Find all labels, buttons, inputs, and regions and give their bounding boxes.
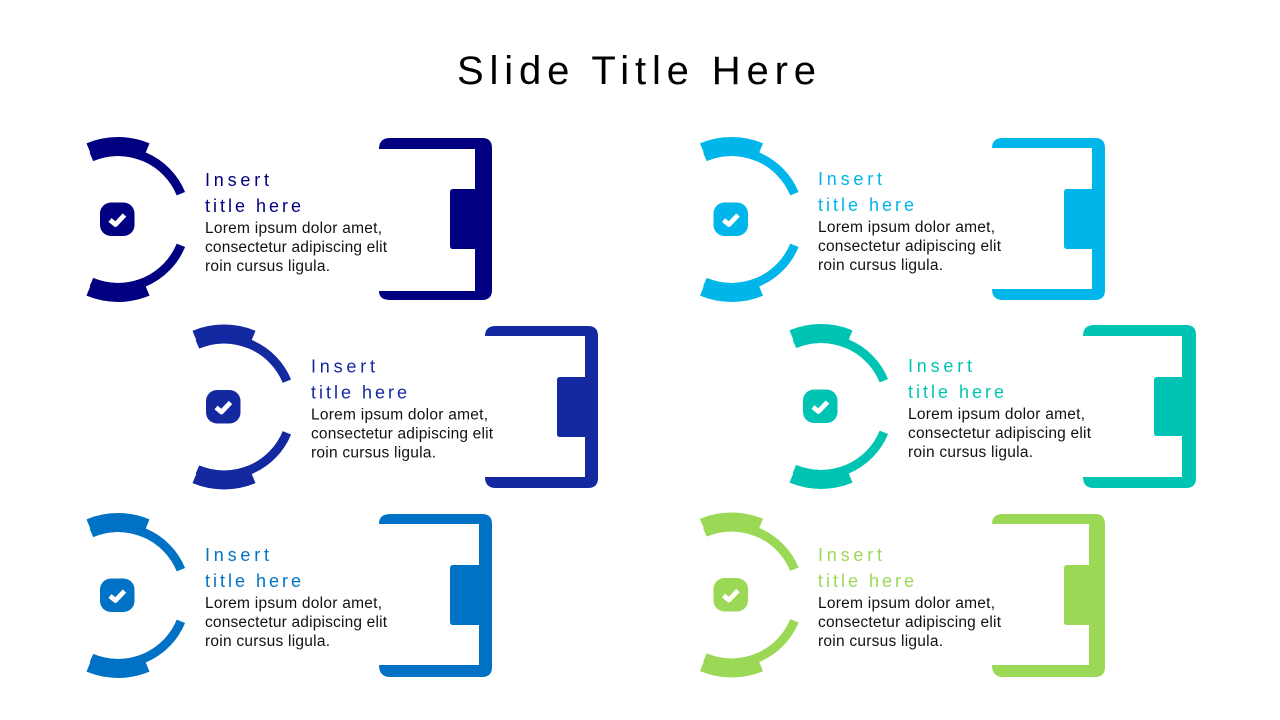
text: blue item: Insert — [205, 545, 269, 565]
text: teal item: consectetur adipiscing elit — [908, 425, 1092, 442]
text: sky blue item: title here — [818, 195, 914, 215]
text: teal item: roin cursus ligula. — [908, 444, 1033, 461]
bracket: navy — [379, 138, 492, 300]
icon: royal blue ring with check — [196, 334, 287, 480]
text: sky blue item: roin cursus ligula. — [818, 257, 943, 274]
text: blue item: roin cursus ligula. — [205, 633, 330, 650]
text: teal item: title here — [908, 382, 1004, 402]
panel: teal item — [793, 325, 1196, 488]
bracket: green — [992, 514, 1105, 677]
text: navy item: Lorem ipsum dolor amet, — [205, 220, 382, 237]
text: navy item: Insert — [205, 170, 269, 190]
bracket: blue — [379, 514, 492, 677]
bracket: sky blue — [992, 138, 1105, 300]
icon: navy ring with check — [90, 147, 181, 292]
text: sky blue item: Insert — [818, 169, 882, 189]
text: green item: Insert — [818, 545, 882, 565]
bracket: royal blue — [485, 326, 598, 488]
panel: green item — [704, 514, 1105, 677]
text: royal blue item: roin cursus ligula. — [311, 444, 436, 462]
icon: teal ring with check — [793, 334, 884, 479]
text: royal blue item — [311, 356, 494, 462]
text: royal blue item: consectetur adipiscing elit — [311, 426, 494, 442]
text: blue item: consectetur adipiscing elit — [205, 614, 388, 631]
title: Slide Title Here — [457, 49, 816, 93]
text: green item: roin cursus ligula. — [818, 633, 943, 650]
text: sky blue item: consectetur adipiscing elit — [818, 238, 1002, 255]
text: sky blue item — [818, 169, 1002, 274]
text: royal blue item: Insert — [311, 356, 375, 376]
text: teal item — [908, 356, 1092, 461]
text: blue item: Lorem ipsum dolor amet, — [205, 595, 382, 612]
text: blue item: title here — [205, 571, 301, 591]
panel: sky blue item — [704, 138, 1105, 300]
text: navy item: roin cursus ligula. — [205, 258, 330, 275]
text: green item: title here — [818, 571, 914, 591]
text: royal blue item: Lorem ipsum dolor amet, — [311, 406, 488, 424]
text: green item — [818, 545, 1002, 650]
panel: royal blue item — [196, 326, 598, 488]
text: green item: Lorem ipsum dolor amet, — [818, 595, 995, 612]
text: teal item: Lorem ipsum dolor amet, — [908, 406, 1085, 423]
text: blue item — [205, 545, 388, 650]
text: green item: consectetur adipiscing elit — [818, 614, 1002, 631]
text: navy item: title here — [205, 196, 301, 216]
text: royal blue item: title here — [311, 382, 407, 402]
bracket: teal — [1083, 325, 1196, 488]
panel: navy item — [90, 138, 492, 300]
text: teal item: Insert — [908, 356, 972, 376]
icon: blue ring with check — [90, 523, 181, 668]
icon: sky blue ring with check — [704, 147, 794, 292]
text: navy item — [205, 170, 388, 275]
text: sky blue item: Lorem ipsum dolor amet, — [818, 219, 995, 236]
text: navy item: consectetur adipiscing elit — [205, 239, 388, 256]
icon: green ring with check — [704, 522, 794, 668]
panel: blue item — [90, 514, 492, 677]
